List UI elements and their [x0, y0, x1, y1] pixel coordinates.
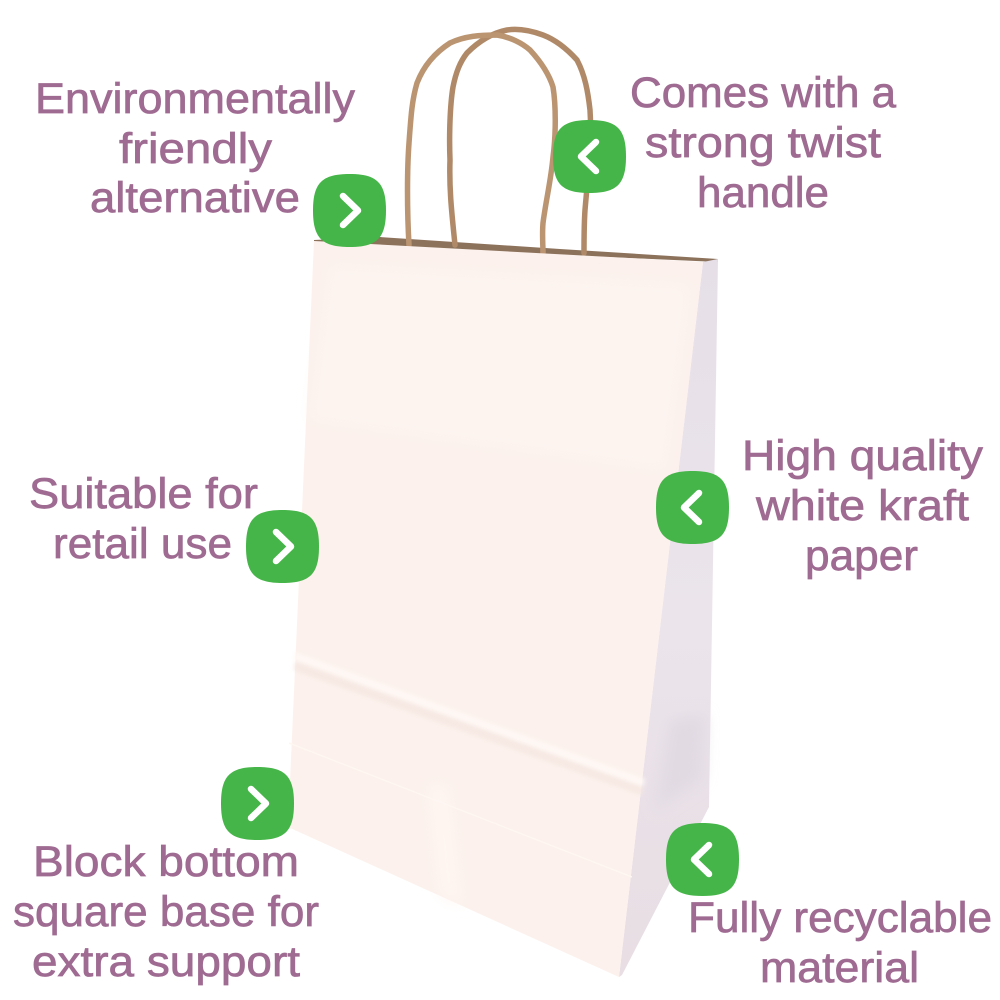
callout: block bottom — [13, 767, 319, 986]
paper highlights and folds — [289, 265, 705, 905]
label text — [742, 432, 984, 580]
icon: left chevron button — [656, 471, 729, 544]
icon: right chevron button — [313, 174, 386, 247]
label text: square base for — [13, 888, 319, 936]
label text: friendly — [119, 125, 273, 173]
label text: handle — [697, 169, 829, 217]
label text — [630, 69, 896, 217]
icon: left chevron button — [553, 120, 626, 193]
label text: Suitable for — [29, 470, 258, 518]
label text: Block bottom — [33, 838, 299, 886]
label text: white kraft — [755, 482, 969, 530]
label text: Comes with a — [630, 69, 896, 117]
label text: paper — [805, 532, 918, 580]
label text: Environmentally — [35, 75, 356, 123]
label text — [688, 894, 992, 992]
icon: left chevron button — [666, 823, 739, 896]
label text — [29, 470, 258, 568]
label text: strong twist — [645, 119, 881, 167]
paper bag — [288, 29, 718, 977]
label text: alternative — [90, 174, 300, 222]
label text — [13, 838, 319, 986]
callout: recyclable — [666, 823, 992, 992]
label text: retail use — [53, 520, 232, 568]
icon: right chevron button — [246, 510, 319, 583]
bag side gusset — [619, 259, 718, 977]
callout: retail use — [29, 470, 319, 583]
label text: Fully recyclable — [688, 894, 992, 942]
label text — [35, 75, 356, 222]
twisted paper handles — [408, 29, 591, 253]
bag front panel — [288, 241, 703, 977]
callout: environmentally friendly — [35, 75, 386, 247]
label text: extra support — [32, 938, 300, 986]
label text: material — [760, 944, 919, 992]
icon: right chevron button — [221, 767, 294, 840]
callout: white kraft paper — [656, 432, 984, 580]
callout: twist handle — [553, 69, 896, 217]
inner back edge of bag — [314, 237, 718, 262]
label text: High quality — [742, 432, 984, 480]
